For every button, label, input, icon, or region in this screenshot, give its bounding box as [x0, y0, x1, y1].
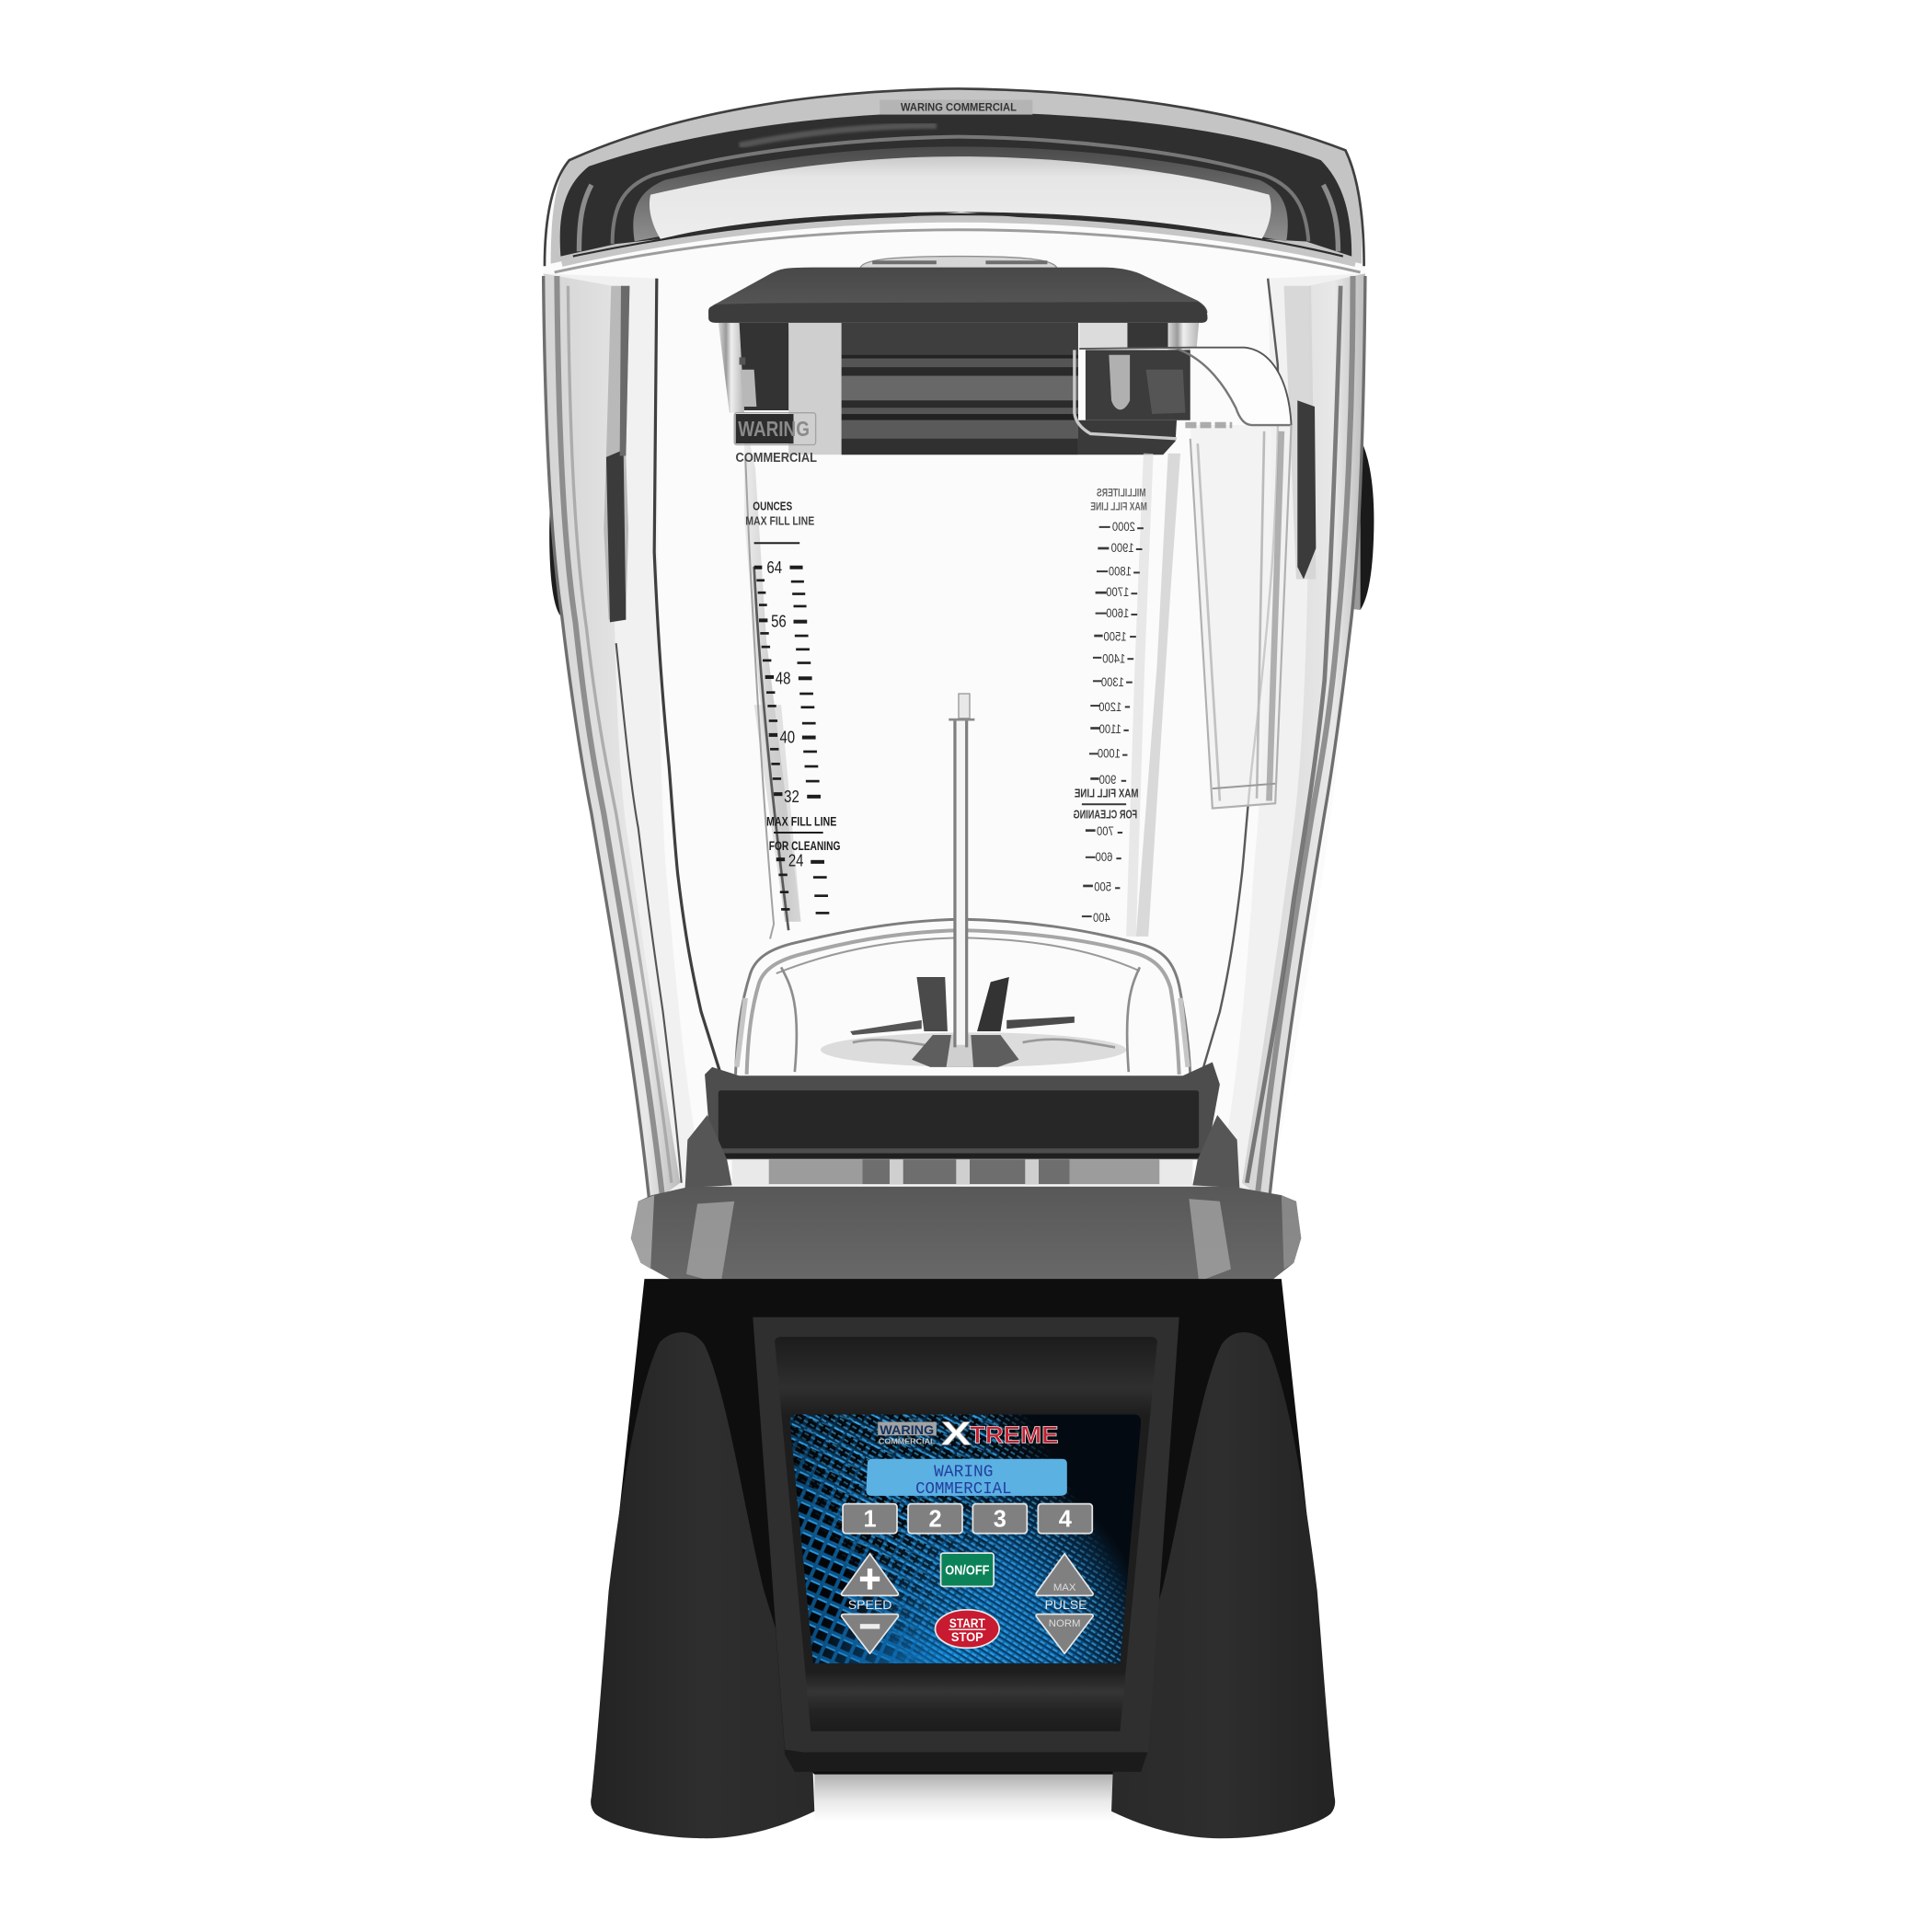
- jar neck light pane: [788, 323, 843, 454]
- pulse controls: MAX: [1053, 1582, 1076, 1593]
- pulse controls: PULSE: [1044, 1597, 1087, 1612]
- enclosure collar: [631, 1187, 1301, 1286]
- jar bowl and blades: [734, 694, 1190, 1075]
- number buttons: 2: [928, 1506, 942, 1532]
- ounces scale: FOR CLEANING: [769, 839, 840, 853]
- jar neck dark edge: [740, 323, 792, 410]
- milliliters scale (seen mirrored through jar): 500: [1094, 879, 1111, 894]
- shell right wall pane: [1217, 273, 1365, 1205]
- milliliters scale (seen mirrored through jar): 1400: [1102, 650, 1125, 666]
- sound enclosure shell: [544, 88, 1365, 1205]
- ounces scale: 24: [788, 851, 804, 870]
- milliliters scale (seen mirrored through jar): 2000: [1112, 519, 1135, 535]
- milliliters scale (seen mirrored through jar): MAX FILL LINE: [1075, 787, 1139, 800]
- cap window halo: [633, 146, 1288, 241]
- shell left outer pane: [544, 273, 680, 1205]
- milliliters scale (seen mirrored through jar): [1073, 487, 1147, 1013]
- control panel bezel: [753, 1317, 1179, 1772]
- number buttons: 4: [1059, 1506, 1073, 1532]
- start stop button: START: [949, 1616, 985, 1630]
- shell left wall pane: [544, 273, 705, 1205]
- milliliters scale (seen mirrored through jar): 100: [1084, 994, 1107, 1013]
- screen background: [789, 1415, 1141, 1663]
- blade base: [821, 1032, 1126, 1067]
- brand logo: TREME: [970, 1422, 1058, 1448]
- milliliters scale (seen mirrored through jar): 1500: [1104, 628, 1127, 644]
- on/off button: ON/OFF: [945, 1564, 989, 1579]
- ounces scale: 8: [799, 993, 807, 1012]
- speed controls: SPEED: [848, 1597, 891, 1612]
- collar highlight lines: [573, 214, 1343, 257]
- speed controls: [842, 1554, 898, 1653]
- jar body: [719, 323, 1199, 939]
- jar: [719, 323, 1292, 1052]
- milliliters scale (seen mirrored through jar): 700: [1097, 823, 1114, 838]
- brand logo: [878, 1414, 1058, 1452]
- drive coupling: [685, 1115, 1239, 1188]
- ounces scale: MAX FILL LINE: [766, 814, 836, 828]
- jar pad: [705, 1062, 1220, 1159]
- shell left column: [604, 286, 629, 622]
- lid top: [708, 268, 1207, 313]
- centre rod: [949, 694, 974, 1047]
- brand logo: WARING: [880, 1422, 934, 1437]
- ounces scale: [745, 499, 840, 1052]
- jar right wall band: [1136, 454, 1180, 937]
- side knob: right: [1350, 439, 1374, 610]
- jar lid: [708, 257, 1207, 323]
- base body: [591, 1279, 1335, 1838]
- ounces scale: 4: [805, 1035, 811, 1052]
- milliliters scale (seen mirrored through jar): FOR CLEANING: [1073, 807, 1137, 821]
- milliliters scale (seen mirrored through jar): 1700: [1106, 584, 1129, 600]
- shell right outer pane: [1242, 273, 1365, 1205]
- number buttons: 1: [863, 1506, 877, 1532]
- jar brand: WARING: [738, 417, 810, 441]
- milliliters scale (seen mirrored through jar): 1200: [1098, 699, 1121, 714]
- milliliter ticks: [1078, 526, 1144, 1006]
- lid band: [708, 302, 1207, 323]
- shell right column: [1284, 286, 1316, 579]
- milliliters scale (seen mirrored through jar): 1600: [1106, 605, 1129, 620]
- milliliters scale (seen mirrored through jar): 400: [1093, 910, 1110, 925]
- milliliters scale (seen mirrored through jar): 1000: [1098, 745, 1121, 761]
- shell ridge lines: [544, 276, 1365, 1202]
- brand logo: COMMERCIAL: [879, 1437, 936, 1446]
- milliliters scale (seen mirrored through jar): 600: [1096, 849, 1112, 864]
- milliliters scale (seen mirrored through jar): 900: [1099, 772, 1116, 787]
- number buttons: 3: [994, 1506, 1006, 1532]
- handle: [1079, 348, 1292, 809]
- ground shadow: [814, 1769, 1115, 1821]
- cap dark outline: [545, 88, 1364, 266]
- bowl rim: [736, 919, 1190, 1075]
- milliliters scale (seen mirrored through jar): 1100: [1099, 721, 1121, 736]
- cap streaks: [579, 126, 1338, 251]
- number buttons: [843, 1504, 1092, 1534]
- left foot pad: [591, 1332, 814, 1838]
- illustration: Waring Xtreme blender: [541, 87, 1374, 1838]
- LCD display: WARING: [934, 1461, 993, 1481]
- milliliters scale (seen mirrored through jar): 1300: [1101, 674, 1124, 689]
- ounces scale: 32: [784, 787, 799, 806]
- ounces scale: MAX FILL LINE: [745, 514, 814, 528]
- ounces scale: OUNCES: [753, 499, 792, 512]
- ounces scale: 56: [771, 612, 787, 631]
- jar neck right dark block: [1078, 420, 1177, 454]
- jar brand: [734, 413, 817, 466]
- jar rim right: [1075, 323, 1199, 439]
- start stop button: [936, 1610, 999, 1648]
- LCD display: COMMERCIAL: [915, 1478, 1012, 1499]
- milliliters scale (seen mirrored through jar): 1900: [1111, 540, 1134, 555]
- ounce ticks minor: [754, 566, 789, 911]
- jar left wall band: [744, 419, 801, 922]
- lid nub: [860, 257, 1057, 269]
- cap window: [650, 156, 1271, 239]
- milliliters scale (seen mirrored through jar): MILLILITERS: [1097, 487, 1146, 500]
- bowl glass: [734, 920, 1190, 1075]
- on/off button: [941, 1553, 994, 1586]
- cap base: [551, 90, 1362, 264]
- enclosure top cap: [545, 88, 1364, 272]
- pulse controls: [1036, 1554, 1093, 1653]
- enclosure label tab: WARING COMMERCIAL: [901, 101, 1017, 114]
- milliliters scale (seen mirrored through jar): MAX FILL LINE: [1090, 500, 1147, 512]
- cap dark band: [560, 112, 1351, 257]
- control screen: [789, 1414, 1141, 1663]
- start stop button: STOP: [951, 1629, 983, 1644]
- jar brand: COMMERCIAL: [736, 451, 817, 466]
- brand logo: X: [941, 1414, 972, 1452]
- pulse controls: NORM: [1049, 1618, 1081, 1629]
- side knob: left: [549, 475, 568, 616]
- jar neck dark core: [842, 323, 1078, 454]
- LCD display: [867, 1459, 1067, 1499]
- blades: [916, 977, 948, 1031]
- ounces scale: 48: [776, 669, 790, 688]
- milliliters scale (seen mirrored through jar): 1800: [1109, 563, 1132, 579]
- ounce ticks major: [789, 566, 834, 1045]
- ounces scale: 64: [766, 558, 782, 577]
- ounces scale: 40: [779, 728, 795, 747]
- jar neck silver edge: [719, 323, 744, 413]
- right foot pad: [1111, 1332, 1335, 1838]
